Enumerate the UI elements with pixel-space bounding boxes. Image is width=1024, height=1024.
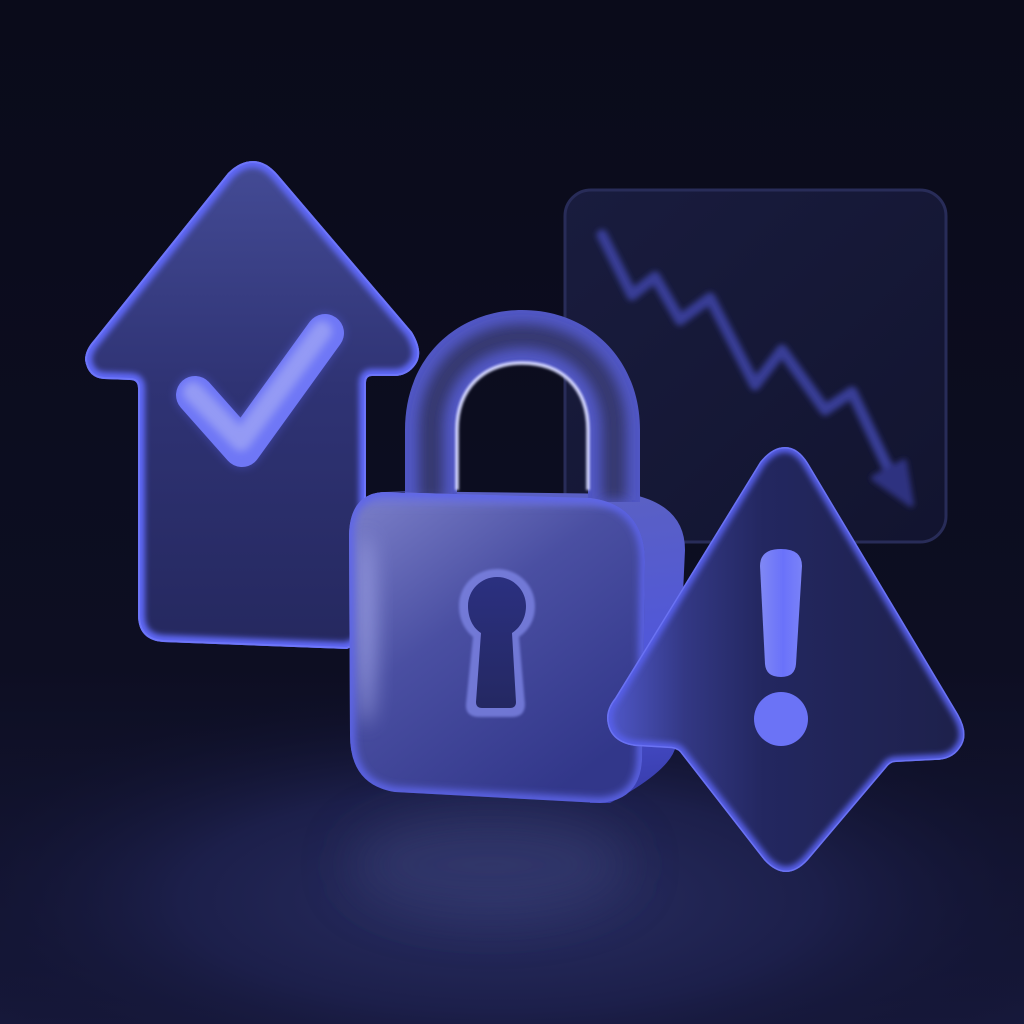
shackle xyxy=(400,305,645,505)
keyhole xyxy=(459,569,535,717)
check mark xyxy=(193,331,325,448)
warning body xyxy=(600,440,970,880)
lock side xyxy=(385,491,685,803)
panel: falling chart xyxy=(565,190,946,542)
icon: up arrow with check xyxy=(80,155,425,655)
icon: padlock xyxy=(345,305,685,915)
chart line: downward trend xyxy=(602,235,911,504)
icon: warning arrow with exclamation xyxy=(600,440,970,880)
lock floor reflection xyxy=(350,815,630,915)
arrow body xyxy=(80,155,425,655)
exclamation mark xyxy=(754,549,808,746)
lock body xyxy=(345,488,650,808)
